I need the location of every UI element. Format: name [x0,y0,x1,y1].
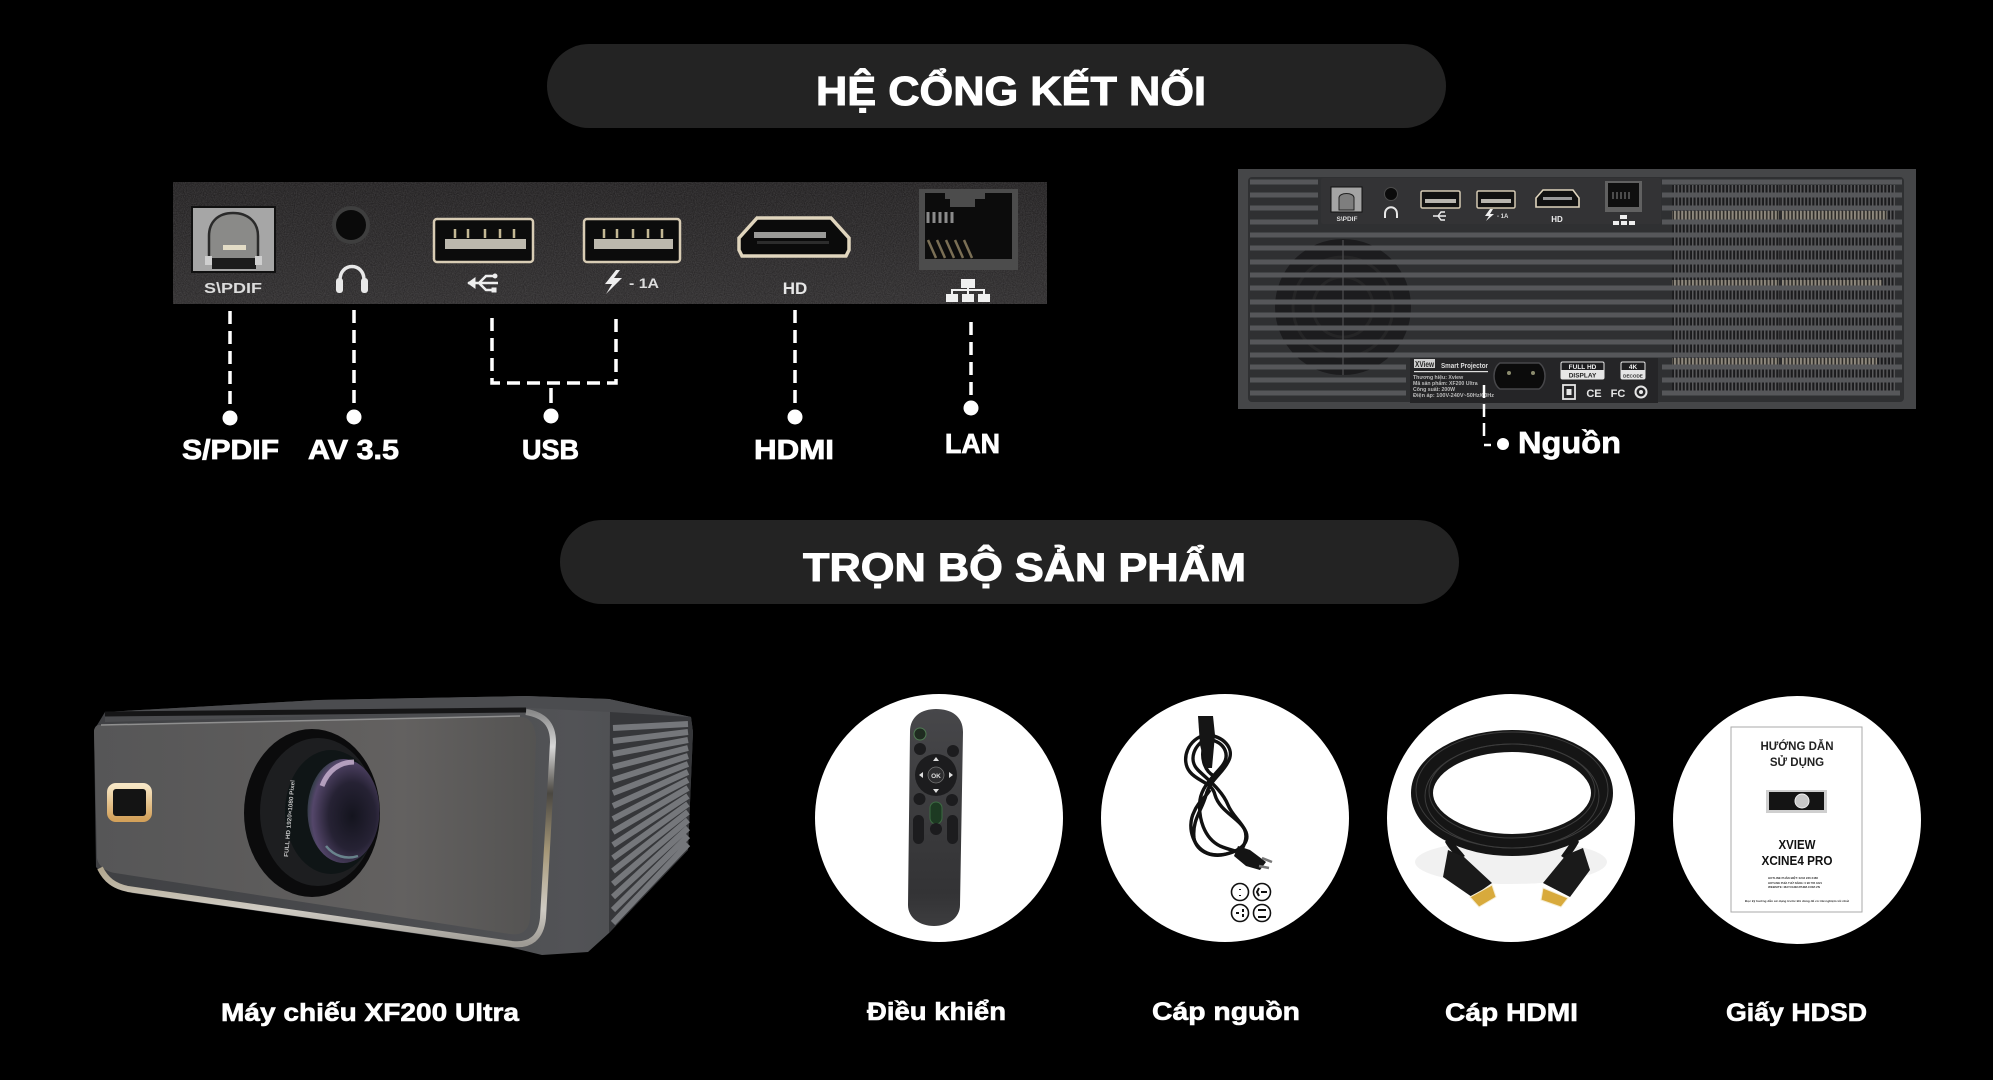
rating label plate: Công suất: 200W [1413,386,1455,393]
HDMI plug: left [1443,850,1496,907]
outlet icons [1232,884,1270,922]
product circle: user manual: XVIEW [1778,837,1816,852]
caption: Máy chiếu XF200 Ultra: Máy chiếu XF200 Ultra [221,999,520,1027]
callout: USB: USB [522,434,579,465]
panel: close-up of connection ports [173,182,1047,304]
badge: Full HD display: FULL HD [1569,364,1597,371]
port: S/PDIF optical: S\PDIF [204,280,262,297]
mini port plate: HD [1551,215,1563,224]
rating label plate [1410,358,1658,403]
callout: AV 3.5: AV 3.5 [308,434,399,465]
callout: Nguồn power: Nguồn [1518,425,1621,460]
product circle: user manual: SỬ DỤNG [1770,756,1824,769]
icon: network [946,279,990,302]
mini port plate [1321,178,1661,225]
badge: 4K decode: 4K [1629,364,1637,371]
badge: Full HD display [1561,362,1604,380]
caption: Cáp nguồn: Cáp nguồn [1152,998,1300,1026]
caption: Điều khiển: Điều khiển [867,998,1006,1026]
port: USB 2 with 1A charge icon: - 1A [629,275,659,291]
badge: Full HD display: DISPLAY [1569,372,1597,380]
remote body [908,709,963,926]
product image: projector [94,696,693,955]
manual thumbnail [1766,790,1827,813]
side grille [609,712,693,933]
port: HDMI [739,218,849,298]
certification marks: CE [1586,388,1602,400]
mini port plate: - 1A [1497,214,1509,220]
front plate with chrome trim [94,717,536,934]
power socket [1494,363,1545,389]
heading pill: HỆ CỔNG KẾT NỐI: HỆ CỔNG KẾT NỐI [816,67,1206,114]
product circle: remote control: OK [931,773,941,780]
callout: S/PDIF [182,311,279,465]
heading pill: TRỌN BỘ SẢN PHẨM [560,520,1459,604]
callout: LAN [945,322,1000,459]
badge: 4K decode: DECODE [1623,374,1643,378]
rating label plate: Mã sản phẩm: XF200 Ultra [1413,380,1478,387]
product circle: user manual: Đọc kỹ hướng dẫn sử dụng trước khi dùng để có trải nghiệm tốt nhất [1745,899,1849,903]
cable [1186,735,1248,858]
port: HDMI: HD [783,279,807,298]
product circle: remote control [815,694,1063,942]
callout: AV 3.5 [308,310,399,465]
product circle: power cable [1101,694,1349,942]
product circle: user manual: HƯỚNG DẪN [1760,740,1834,753]
port: S/PDIF optical [192,207,275,297]
rating label plate: Smart Projector [1441,363,1488,370]
body shell [94,696,693,955]
caption: Cáp HDMI: Cáp HDMI [1445,999,1578,1027]
slats [1250,182,1902,393]
certification marks [1563,385,1646,400]
mini port plate: S\PDIF [1337,216,1358,223]
lens [244,729,380,897]
camera window [110,786,149,819]
callout: HDMI [754,310,834,465]
coil [1416,732,1608,858]
callout: S/PDIF: S/PDIF [182,434,279,465]
vent mesh [1672,185,1895,392]
lens: FULL HD 1920×1080 Pixel [284,780,297,857]
product circle: user manual: XCINE4 PRO [1762,853,1832,868]
caption: Giấy HDSD: Giấy HDSD [1726,999,1867,1027]
heading pill: HỆ CỔNG KẾT NỐI [547,44,1446,128]
badge: 4K decode [1621,362,1645,379]
product circle: user manual [1673,696,1921,944]
callout: HDMI: HDMI [754,434,834,465]
rating label plate: XView [1415,360,1435,369]
certification marks: FC [1611,388,1625,400]
port: USB 1 [434,219,533,292]
product circle: user manual: HOTLINE PHÍA THỨ NĂNG: 0 98 765 4321 [1768,880,1822,885]
port: audio jack with headphone icon [332,206,370,293]
callout: Nguồn power [1484,385,1621,460]
product circle: user manual: HOTLINE PHÂN BIỆT: 0242 236 2486 [1768,875,1818,880]
product circle: HDMI cable [1387,694,1635,942]
port: USB 2 with 1A charge icon [584,219,680,294]
HDMI plug: right [1541,848,1590,907]
callout: USB [492,318,616,465]
panel: projector rear view [1238,169,1916,409]
port: LAN RJ45 [919,189,1018,302]
callout: LAN: LAN [945,428,1000,459]
rating label plate: Điện áp: 100V-240V~50Hz/60Hz [1413,393,1494,399]
product circle: user manual: WEBSITE: MAYCHIEUPHIM.COM.VN [1768,885,1820,889]
rating label plate: Thương hiệu: Xview [1413,375,1464,381]
icon: USB trident [468,274,498,292]
fan grille [1275,239,1411,375]
heading pill: TRỌN BỘ SẢN PHẨM: TRỌN BỘ SẢN PHẨM [803,543,1246,590]
